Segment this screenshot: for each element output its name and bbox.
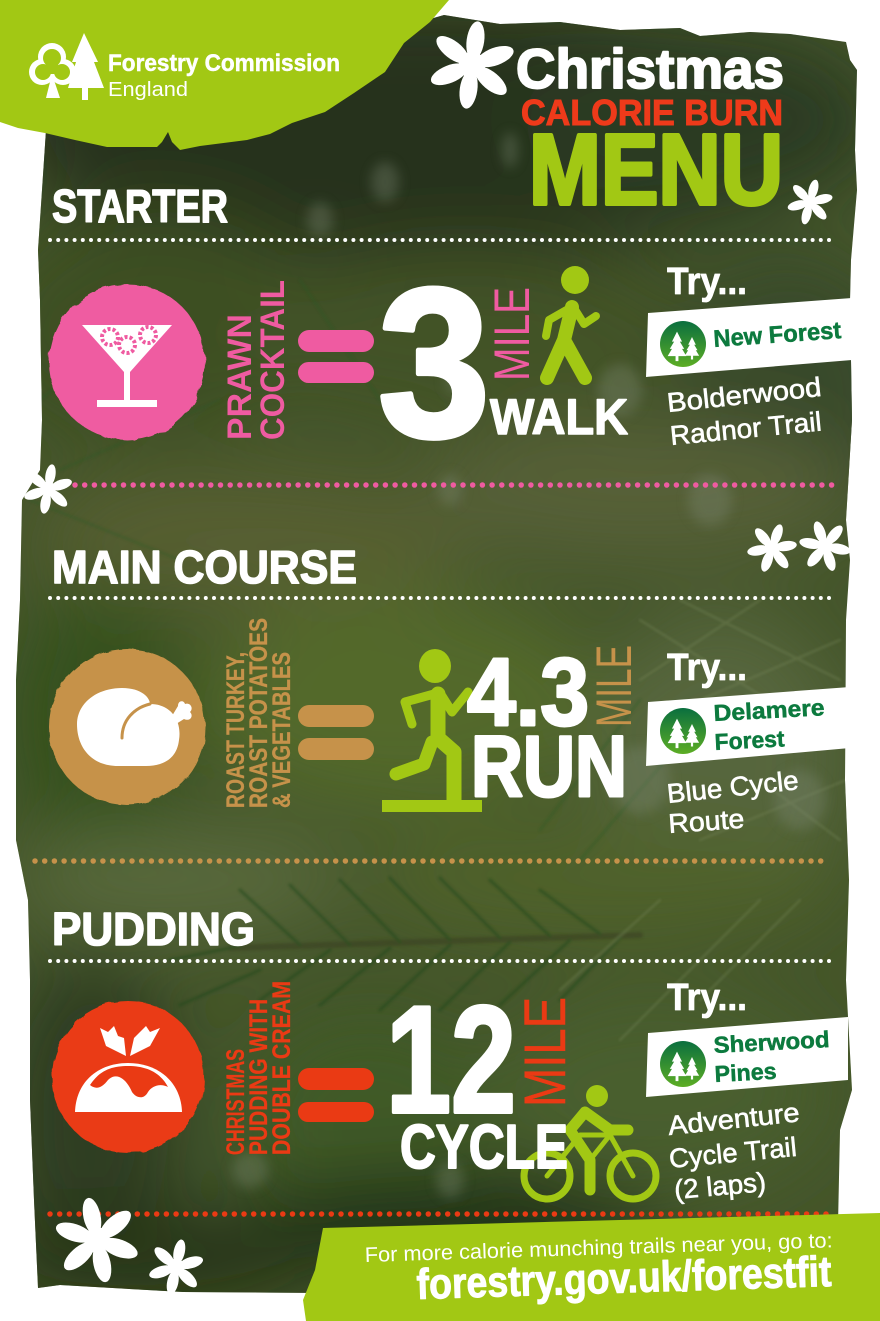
label: roast turkey, roast potatoes and vegetables: ROAST POTATOES [245,618,273,808]
heading: Pudding: PUDDING [52,903,255,955]
label: christmas pudding with double cream: DOUBLE CREAM [268,981,296,1155]
icon: roast turkey [49,649,205,805]
section: pudding [52,975,848,1205]
label: prawn cocktail: COCKTAIL [254,280,292,440]
text: trail name [665,765,800,839]
text: trail name: Blue Cycle [665,765,800,809]
label: christmas pudding with double cream [222,981,296,1155]
icon: walker [546,266,596,378]
footer call to action [303,1213,880,1321]
text: trail name: Radnor Trail [669,407,823,451]
text: England: England [108,79,188,101]
icon: snowflake bottom small [144,1234,209,1300]
icon: snowflake near title [783,174,838,230]
heading: Starter: STARTER [52,180,228,232]
pine branches [42,398,845,1040]
label: roast turkey, roast potatoes and vegetables: ROAST TURKEY, [222,652,250,808]
label: prawn cocktail: PRAWN [221,314,259,440]
icon: runner [382,649,482,812]
sign: Delamere Forest [646,687,850,766]
heading: Main Course: MAIN COURSE [52,541,357,593]
suggestion: New Forest [646,261,852,451]
text: trail name [666,1097,801,1205]
title: Christmas Calorie Burn Menu [424,16,784,226]
top-left green corner banner [0,0,449,150]
icon: snowflake left [20,460,76,518]
label: roast turkey, roast potatoes and vegetables [222,618,296,808]
unit: mile: MILE [484,287,540,381]
text: website: forestry.gov.uk/forestfit [416,1248,832,1309]
text: trail name [665,372,823,451]
logo: Forestry Commission England [29,33,340,101]
icon: snowflake bottom large [47,1189,147,1291]
number: 4.3: 4.3 [467,639,589,746]
label: christmas pudding with double cream: PUDDING WITH [245,999,273,1155]
label: roast turkey, roast potatoes and vegetables: & VEGETABLES [268,652,296,808]
icon: title snowflake [424,16,521,115]
number: 12: 12 [386,975,516,1145]
heading: Menu: MENU [529,114,783,226]
sign: Sherwood Pines [646,1017,848,1097]
text: trail name: Bolderwood [665,372,823,418]
suggestion: Sherwood Pines [646,977,848,1205]
sign: Delamere Forest: Forest [714,725,785,755]
equals sign [298,705,374,760]
label: prawn cocktail [221,280,292,440]
equals sign [298,330,374,383]
sign: New Forest: New Forest [713,317,842,353]
activity: walk: WALK [490,389,628,445]
text: Try: Try... [667,647,747,689]
text: Try: Try... [667,261,747,303]
text: trail name: Adventure [666,1097,801,1141]
sign: New Forest [646,298,852,377]
icon: prawn cocktail [49,284,205,440]
sign: Sherwood Pines: Sherwood [713,1026,830,1058]
heading: Christmas: Christmas [516,37,784,100]
text: trail name: Route [667,804,745,839]
icon: oak and pine trees [29,33,104,100]
icon: cyclist [524,1085,656,1199]
footer green banner [303,1213,880,1321]
text: Try: Try... [667,977,747,1019]
sign: Delamere Forest: Delamere [713,694,825,726]
text: trail name: (2 laps) [673,1167,767,1205]
unit: mile: MILE [586,645,642,727]
heading: Calorie Burn: CALORIE BURN [521,92,783,133]
activity: run: RUN [471,719,627,815]
icon: snowflake right 1 [741,516,803,580]
suggestion: Delamere Forest [646,647,850,839]
section: main course [49,618,850,839]
activity: cycle: CYCLE [400,1113,568,1182]
text: more trails: For more calorie munching trails near you, go to: [364,1229,833,1267]
text: organisation name: Forestry Commission [108,50,340,77]
number: 3: 3 [378,244,490,481]
section: starter [49,244,852,481]
unit: mile: MILE [513,997,578,1107]
icon: christmas pudding [52,1001,204,1153]
icon: snowflake right 2 [789,510,861,582]
sign: Sherwood Pines: Pines [714,1058,777,1087]
text: trail name: Cycle Trail [668,1132,798,1174]
label: christmas pudding with double cream: CHRISTMAS [222,1049,250,1155]
equals sign [298,1068,374,1122]
